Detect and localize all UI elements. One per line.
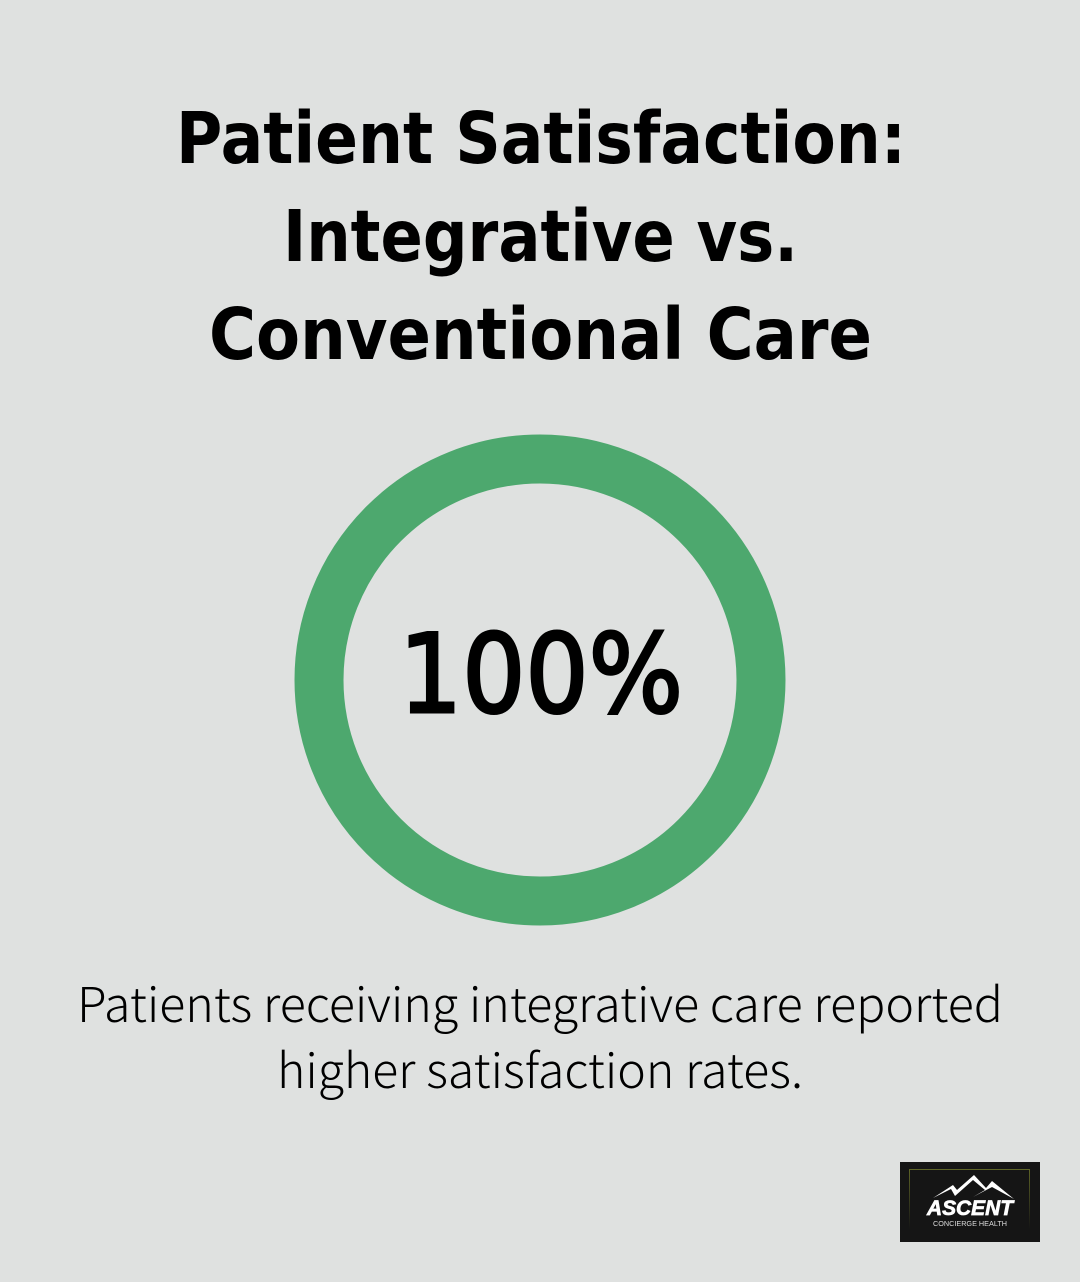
icon: mountains: [933, 1175, 1014, 1199]
logo name: ASCENT: [926, 1197, 1015, 1220]
description: Patients receiving integrative care reported: [77, 966, 1003, 1036]
logo badge: [900, 1162, 1040, 1242]
description: higher satisfaction rates.: [277, 1032, 803, 1102]
description: [77, 966, 1003, 1102]
ring value: 100%: [399, 611, 683, 738]
title: Patient Satisfaction:: [176, 97, 906, 180]
title: Integrative vs.: [283, 195, 798, 278]
progress ring: [319, 459, 761, 901]
title: [176, 97, 906, 376]
title: Conventional Care: [209, 293, 872, 376]
logo tagline: CONCIERGE HEALTH: [933, 1219, 1007, 1228]
